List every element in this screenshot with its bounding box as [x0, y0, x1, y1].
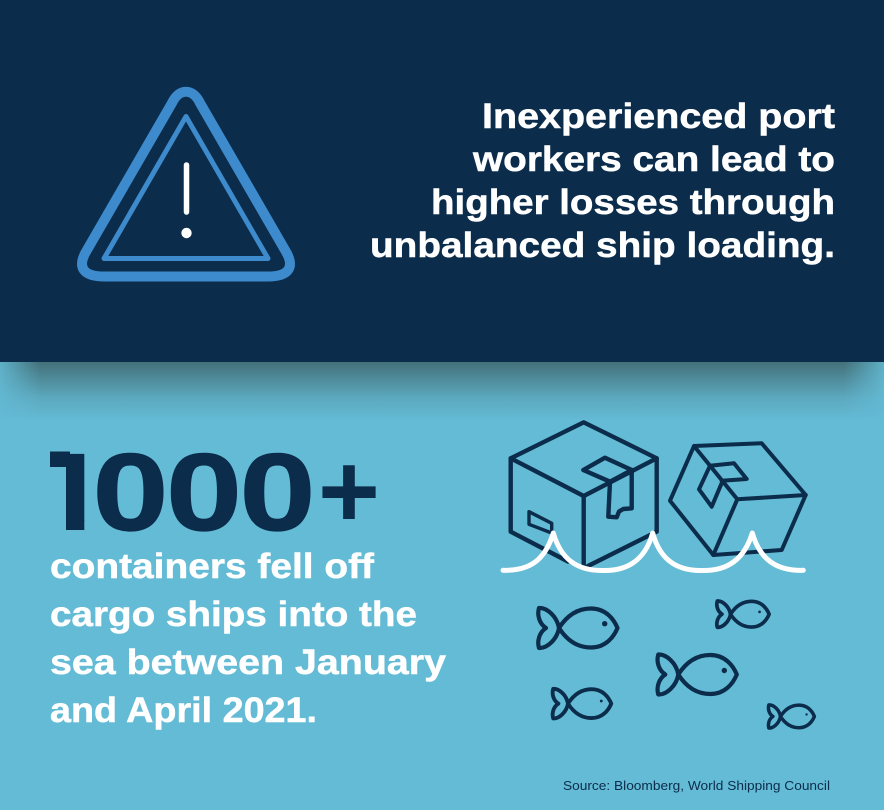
heading: port workers statement: higher losses through — [431, 183, 835, 222]
icon: fish 1 — [538, 608, 618, 648]
icon: fish 5 — [768, 705, 814, 728]
icon: fish 4 — [553, 689, 611, 718]
text block: containers lost: cargo ships into the — [50, 595, 417, 634]
big number: 0 — [240, 431, 316, 554]
big number: 1 — [36, 432, 108, 555]
source note: Source: Bloomberg, World Shipping Council — [563, 778, 830, 793]
icon: tilted box — [670, 443, 806, 555]
heading: port workers statement: Inexperienced port — [482, 97, 835, 136]
icon: warning triangle — [82, 92, 290, 276]
icon: fish 2 — [658, 654, 737, 695]
text block: containers lost: sea between January — [50, 643, 447, 682]
heading: port workers statement — [370, 97, 835, 265]
icon: fish 3 — [717, 601, 769, 627]
text block: containers lost: and April 2021. — [50, 691, 317, 730]
icon: upright box — [511, 422, 657, 567]
panel: top warning background — [0, 0, 884, 362]
text block: containers lost: containers fell off — [50, 547, 374, 586]
heading: port workers statement: workers can lead to — [472, 140, 835, 179]
big number: 0 — [166, 431, 242, 554]
big number: 0 — [92, 431, 168, 554]
text block: containers lost — [50, 547, 447, 730]
panel shadow — [0, 362, 884, 412]
artwork layer — [50, 86, 835, 792]
heading: port workers statement: unbalanced ship loading. — [370, 226, 835, 265]
big number — [50, 452, 376, 532]
big number: + — [318, 432, 380, 550]
wave line — [503, 533, 803, 571]
